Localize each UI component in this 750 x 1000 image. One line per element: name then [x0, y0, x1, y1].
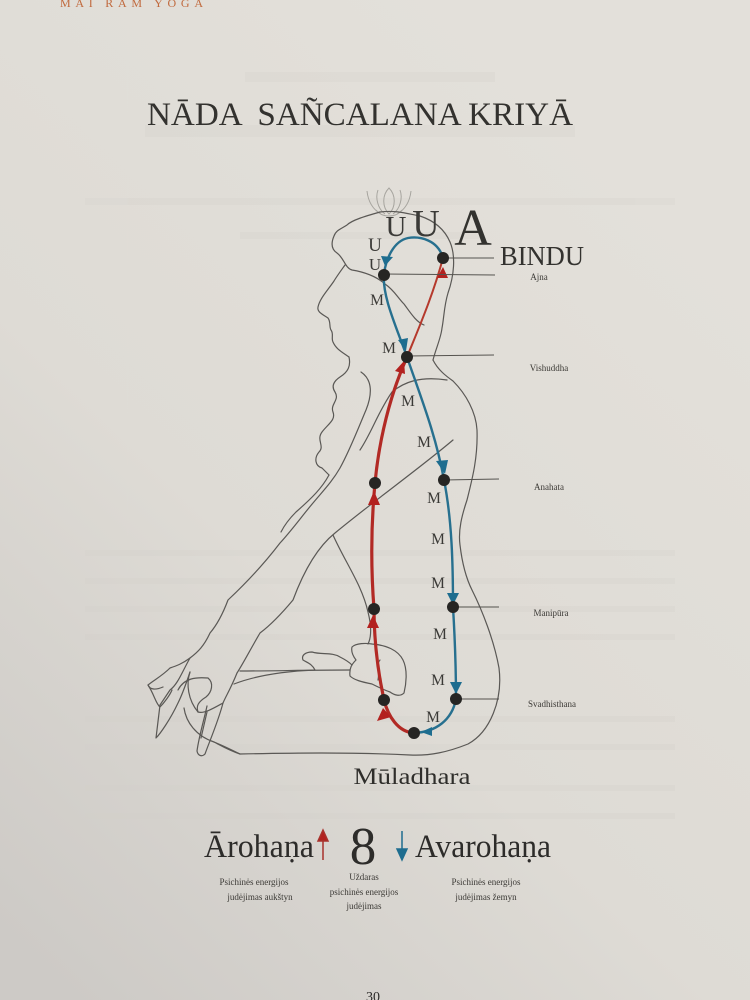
inner arm and forearm line — [197, 440, 453, 756]
right hand — [350, 643, 406, 695]
channel: Avarohaṇa blue descending — [381, 238, 462, 736]
chakra labels: Vishuddha — [530, 363, 568, 373]
legend: closed circuit eight: judėjimas — [346, 901, 382, 911]
legend: Ārohaṇa: judėjimas aukštyn — [226, 892, 293, 902]
chakra labels: Manipūra — [534, 608, 568, 618]
chakra labels: Ajna — [530, 272, 548, 282]
mantra letters: U — [386, 211, 407, 243]
mantra letters: M — [370, 292, 384, 309]
mantra letters: M — [431, 575, 445, 592]
icon: crown lotus — [367, 188, 411, 216]
legend: closed circuit eight: psichinės energijos — [330, 887, 399, 897]
mantra letters: M — [427, 490, 441, 507]
chakra labels: BINDU — [500, 241, 584, 271]
mantra letters: M — [417, 434, 431, 451]
left hand gesture — [156, 658, 190, 738]
legend: Avarohaṇa: Avarohaṇa — [415, 829, 551, 865]
legend: closed circuit eight: 8 — [350, 818, 376, 876]
chakra points — [368, 252, 462, 739]
chakra leader lines — [384, 258, 499, 699]
mantra letters: U — [368, 235, 382, 256]
chakra labels: Anahata — [534, 482, 564, 492]
mantra letters: U — [412, 203, 440, 245]
mantra letters: M — [426, 709, 440, 726]
crossed legs — [240, 670, 350, 671]
legend: closed circuit eight — [330, 818, 399, 911]
legend: Avarohaṇa: judėjimas žemyn — [454, 892, 517, 902]
mantra letters: M — [433, 626, 447, 643]
legend: Ārohaṇa: Ārohaṇa — [204, 829, 314, 865]
legend: Ārohaṇa: Psichinės energijos — [219, 877, 289, 887]
face profile — [318, 265, 349, 357]
shoulder curve — [360, 379, 447, 450]
mantra letters — [368, 200, 492, 726]
chakra labels — [354, 241, 584, 789]
head and hair — [332, 212, 424, 325]
legend: closed circuit eight: Uždaras — [349, 872, 379, 882]
title: NĀDA SAÑCALANA KRIYĀ — [147, 96, 573, 133]
channel: Ārohaṇa red ascending — [367, 258, 448, 733]
arrow: down blue — [397, 831, 407, 860]
chakra labels: Svadhisthana — [528, 699, 576, 709]
figure: seated body outline — [148, 211, 500, 756]
mantra letters: M — [401, 393, 415, 410]
mantra letters: M — [431, 672, 445, 689]
chakra labels: Mūladhara — [354, 764, 470, 789]
legend: Avarohaṇa: Psichinės energijos — [451, 877, 521, 887]
mantra letters: M — [431, 531, 445, 548]
mantra letters: A — [454, 200, 492, 257]
hair down the neck — [316, 357, 350, 475]
arrow: up red — [318, 830, 328, 860]
mantra letters: M — [382, 340, 396, 357]
legend: Ārohaṇa — [204, 829, 328, 902]
front chest and outer arm — [148, 372, 370, 689]
mantra letters: U — [369, 255, 381, 274]
back — [214, 360, 500, 755]
legend: Avarohaṇa — [397, 829, 551, 902]
